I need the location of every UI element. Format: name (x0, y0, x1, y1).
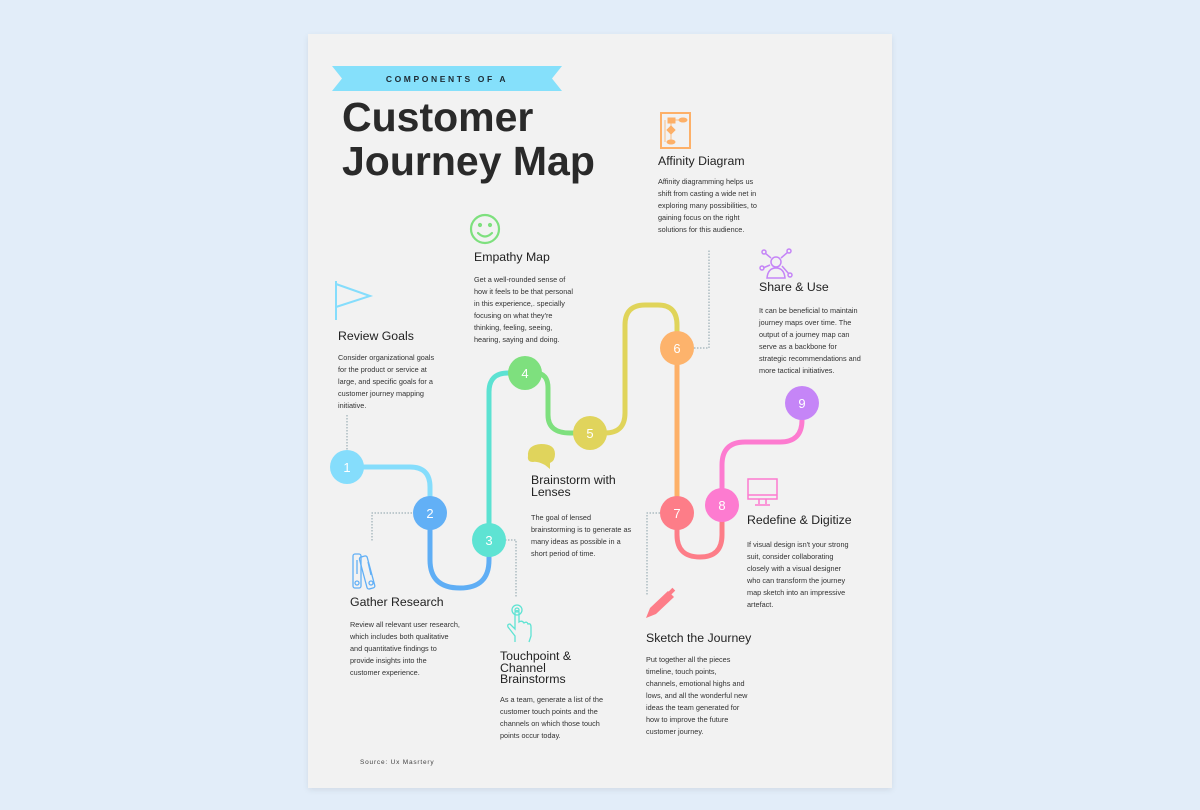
text block: share & use: It can be beneficial to maintain (759, 306, 858, 315)
text block: touchpoint: channels on which those touch (500, 719, 600, 728)
text block: brainstorm: Brainstorm with (531, 473, 616, 487)
text block: share & use: journey maps over time. The (759, 318, 851, 327)
text block: share & use: more tactical initiatives. (759, 366, 834, 375)
text block: touchpoint: customer touch points and the (500, 707, 598, 716)
text block: sketch the journey: ideas the team generated for (646, 703, 739, 712)
text block: touchpoint: As a team, generate a list of the (500, 695, 603, 704)
text block: sketch the journey: Put together all the pieces (646, 655, 730, 664)
text block: sketch the journey: channels, emotional highs and (646, 679, 745, 688)
text block: brainstorm (531, 473, 631, 558)
text block: empathy map: Get a well-rounded sense of (474, 275, 565, 284)
title banner: COMPONENTS OF A (386, 74, 508, 84)
step circles: 4 (521, 366, 529, 381)
text block: touchpoint: Channel (500, 661, 546, 675)
step circles: 5 (586, 426, 594, 441)
text block: brainstorm: short period of time. (531, 549, 596, 558)
text block: gather research: provide insights into the (350, 656, 427, 665)
text block: empathy map: in this experience,. specially (474, 299, 565, 308)
text block: share & use: serve as a backbone for (759, 342, 837, 351)
step circles: 2 (426, 506, 434, 521)
icon: flag (336, 281, 370, 320)
text block: gather research: Review all relevant user research, (350, 620, 460, 629)
text block: empathy map: hearing, saying and doing. (474, 335, 560, 344)
text block: review goals: initiative. (338, 401, 366, 410)
text block: redefine & digitize: who can transform the journey (747, 576, 845, 585)
source: Source: Ux Masrtery (360, 759, 434, 766)
text block: affinity diagram: Affinity diagramming helps us (658, 177, 753, 186)
text block: gather research: which includes both qualitative (350, 632, 449, 641)
text block: share & use: output of a journey map can (759, 330, 849, 339)
text block: sketch the journey: customer journey. (646, 727, 703, 736)
text block: review goals: Consider organizational goals (338, 353, 434, 362)
icon: affinity diagram (661, 113, 690, 148)
text block: touchpoint: Touchpoint & (500, 649, 571, 663)
text block: empathy map: how it feels to be that personal (474, 287, 573, 296)
text block: brainstorm: Lenses (531, 485, 571, 499)
text block: redefine & digitize: map sketch into an impressive (747, 588, 845, 597)
text block: gather research: customer experience. (350, 668, 420, 677)
text block: brainstorm: The goal of lensed (531, 513, 591, 522)
text block: share & use (758, 280, 861, 375)
text block: affinity diagram: exploring many possibilities, to (658, 201, 757, 210)
step circles: 8 (718, 498, 726, 513)
text block: affinity diagram (658, 154, 757, 234)
text block: gather research (350, 595, 460, 677)
text block: redefine & digitize: closely with a visual designer (747, 564, 841, 573)
text block: review goals: for the product or service at (338, 365, 427, 374)
text block: redefine & digitize (747, 513, 852, 609)
text block: share & use: Share & Use (759, 280, 829, 294)
step circles: 9 (798, 396, 806, 411)
text block: empathy map (474, 250, 573, 344)
text block: review goals: large, and specific goals for a (338, 377, 433, 386)
text block: affinity diagram: Affinity Diagram (658, 154, 745, 168)
text block: empathy map: thinking, feeling, seeing, (474, 323, 552, 332)
text block: sketch the journey: lows, and all the wonderful new (646, 691, 747, 700)
title: Journey Map (342, 138, 595, 184)
step circles: 1 (343, 460, 351, 475)
text block: redefine & digitize: If visual design isn't your strong (747, 540, 849, 549)
title: Customer (342, 94, 533, 140)
text block: sketch the journey: how to improve the future (646, 715, 728, 724)
step circles: 6 (673, 341, 681, 356)
text block: touchpoint (500, 649, 603, 740)
icon: pencil (646, 588, 675, 618)
text block: redefine & digitize: suit, consider collaborating (747, 552, 833, 561)
text block: redefine & digitize: Redefine & Digitize (747, 513, 852, 527)
text block: share & use: strategic recommendations and (759, 354, 861, 363)
text block: sketch the journey (646, 631, 752, 736)
text block: empathy map: Empathy Map (474, 250, 550, 264)
text block: touchpoint: Brainstorms (500, 672, 566, 686)
text block: affinity diagram: gaining focus on the right (658, 213, 740, 222)
text block: affinity diagram: shift from casting a wide net in (658, 189, 756, 198)
text block: review goals: Review Goals (338, 329, 414, 343)
text block: brainstorm: many ideas as possible in a (531, 537, 621, 546)
text block: affinity diagram: solutions for this audience. (658, 225, 744, 234)
text block: gather research: Gather Research (350, 595, 444, 609)
icon: binders (353, 554, 375, 589)
text block: gather research: and quantitative findings to (350, 644, 437, 653)
step circles: 3 (485, 533, 493, 548)
icon: brain (528, 444, 555, 469)
card panel (308, 34, 892, 788)
text block: sketch the journey: Sketch the Journey (646, 631, 751, 645)
icon: monitor (748, 479, 777, 505)
text block: redefine & digitize: artefact. (747, 600, 773, 609)
text block: review goals (338, 329, 434, 410)
text block: review goals: customer journey mapping (338, 389, 424, 398)
icon: share network (760, 249, 792, 278)
step circles (330, 331, 819, 557)
path: journey line (347, 305, 802, 588)
text block: touchpoint: points occur today. (500, 731, 561, 740)
icon: touch hand (508, 605, 531, 642)
icon: smiley (471, 215, 499, 243)
step circles: 7 (673, 506, 681, 521)
text block: empathy map: focusing on what they're (474, 311, 552, 320)
text block: brainstorm: brainstorming is to generate as (531, 525, 631, 534)
title banner (332, 66, 562, 91)
text block: sketch the journey: timeline, touch points, (646, 667, 717, 676)
title (342, 94, 595, 184)
